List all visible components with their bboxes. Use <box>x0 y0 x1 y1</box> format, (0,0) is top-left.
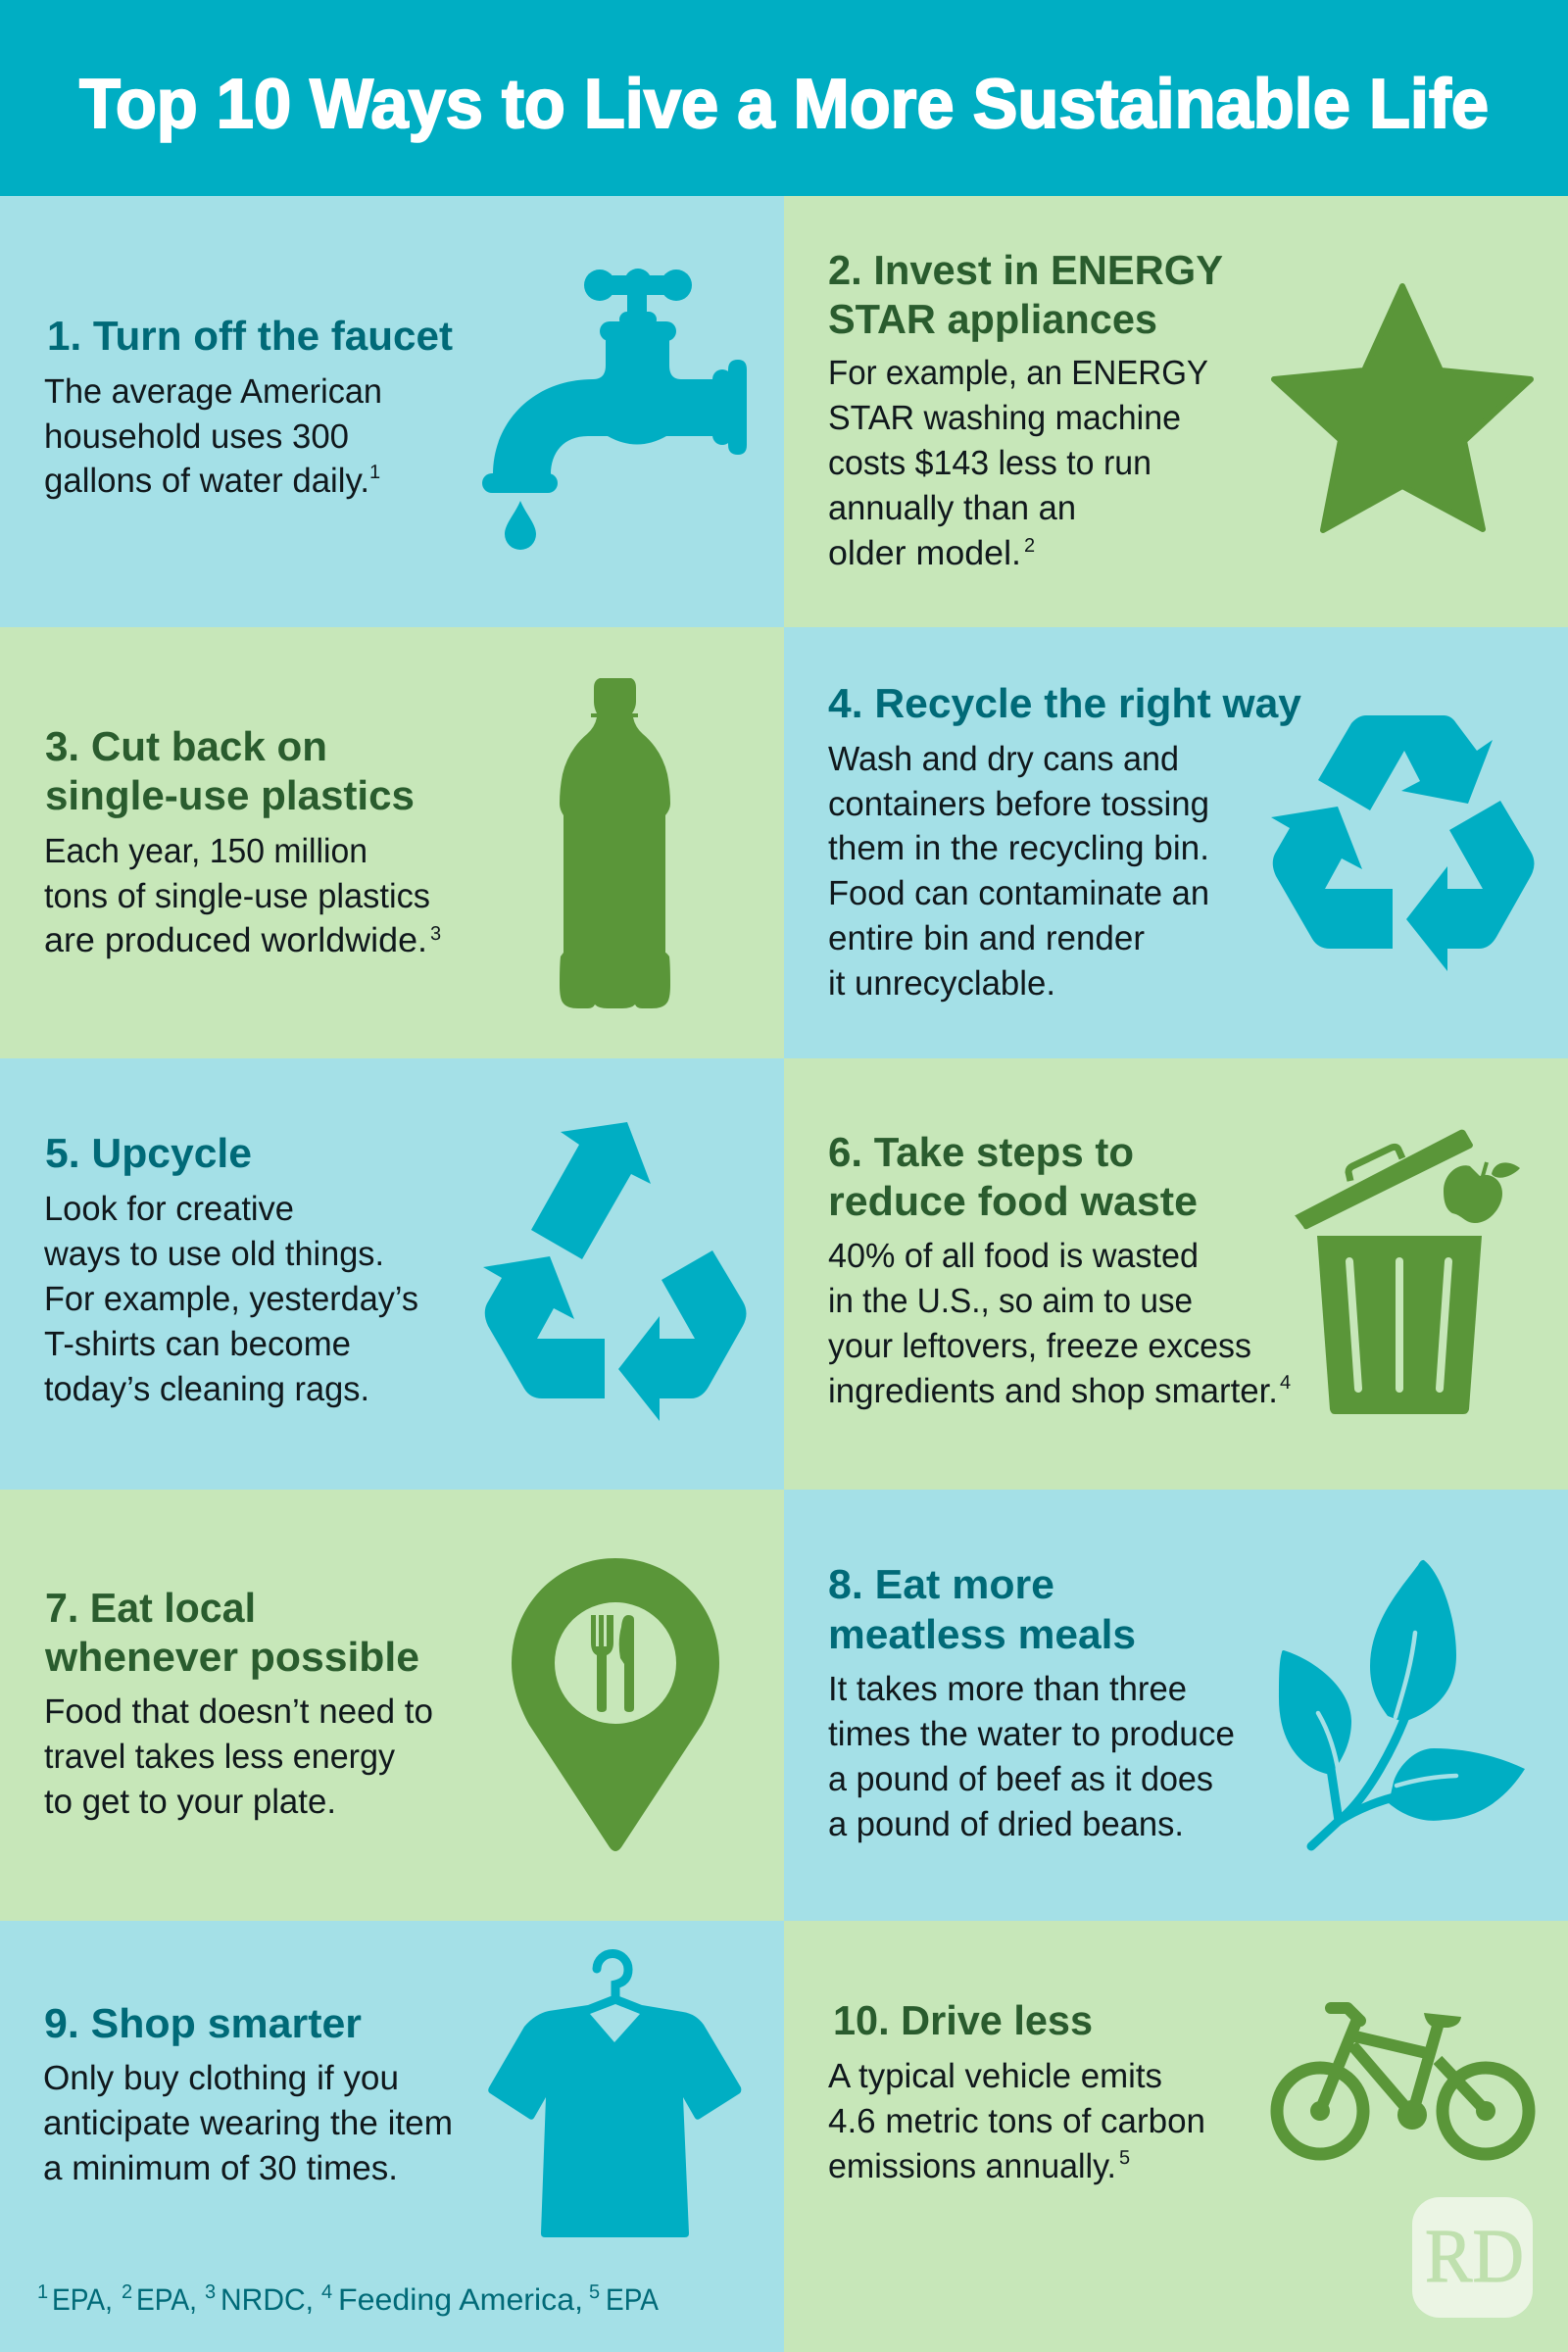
icon: trash can with apple <box>1295 1130 1520 1414</box>
text block: 3: tons of single-use plastics <box>44 877 430 915</box>
text block: 2: annually than an <box>828 489 1076 527</box>
panel: 2 energy star <box>784 196 1568 627</box>
text block: 5: Look for creative <box>44 1190 294 1228</box>
text block: 2: older model. <box>828 534 1021 572</box>
text block: 2: STAR washing machine <box>828 399 1181 437</box>
text block: 10: 4.6 metric tons of carbon <box>828 2102 1205 2140</box>
text block: 4: them in the recycling bin. <box>828 829 1209 867</box>
text block: 9: a minimum of 30 times. <box>43 2149 398 2187</box>
text block: 4 <box>828 740 1209 1003</box>
heading: 7: whenever possible <box>44 1634 419 1680</box>
heading: 3 <box>45 723 415 818</box>
panel: 1 turn off the faucet <box>0 196 784 627</box>
icon: recycle symbol <box>1271 715 1535 971</box>
heading: 2: STAR appliances <box>828 296 1157 342</box>
icon: faucet <box>482 269 747 550</box>
text block: 10: emissions annually. <box>828 2147 1116 2185</box>
heading: 10: 10. Drive less <box>833 1997 1093 2043</box>
icon: bottle <box>560 678 670 1008</box>
footnotes: EPA <box>606 2282 659 2317</box>
footnotes: EPA, <box>52 2282 113 2317</box>
text block: 6: 40% of all food is wasted <box>828 1237 1199 1275</box>
footnotes: EPA, <box>136 2282 197 2317</box>
text block: 4: Food can contaminate an <box>828 874 1209 912</box>
text block: 8: It takes more than three <box>828 1670 1187 1708</box>
panel: 4 recycle the right way <box>784 627 1568 1058</box>
text block: 9 <box>43 2059 453 2187</box>
heading: 1: 1. Turn off the faucet <box>47 313 453 359</box>
heading: 3: single-use plastics <box>45 772 415 818</box>
text block: 2: costs $143 less to run <box>828 444 1152 482</box>
text block: 3: Each year, 150 million <box>44 832 368 870</box>
text block: 6: in the U.S., so aim to use <box>828 1282 1193 1320</box>
heading: 3: 3. Cut back on <box>45 723 327 769</box>
text block: 1: 1 <box>369 462 380 483</box>
text block: 10: A typical vehicle emits <box>828 2057 1162 2095</box>
logo: RD <box>1412 2197 1533 2318</box>
text block: 4: entire bin and render <box>828 919 1145 957</box>
icon: t-shirt on hanger <box>488 1954 741 2237</box>
text block: 5 <box>43 1190 418 1408</box>
logo: RD: RD <box>1425 2213 1524 2298</box>
icon: bicycle <box>1277 2008 1529 2154</box>
text block: 6: your leftovers, freeze excess <box>828 1327 1251 1365</box>
footnotes: 3 <box>205 2281 216 2303</box>
text block: 6: 4 <box>1280 1372 1291 1394</box>
heading: 5: 5. Upcycle <box>45 1130 252 1176</box>
heading: 7: 7. Eat local <box>45 1585 256 1631</box>
panel: 9 shop smarter <box>0 1921 784 2352</box>
text block: 8: times the water to produce <box>828 1715 1235 1753</box>
text block: 1: The average American <box>44 372 382 411</box>
text block: 10: 5 <box>1119 2147 1130 2169</box>
text block: 2: 2 <box>1024 535 1035 557</box>
footnotes <box>37 2281 659 2317</box>
panel: 5 upcycle <box>0 1058 784 1490</box>
text block: 7: Food that doesn’t need to <box>44 1692 433 1731</box>
text block: 8 <box>828 1670 1235 1843</box>
text block: 3: are produced worldwide. <box>44 921 427 959</box>
icon: map pin with fork and knife <box>512 1558 719 1851</box>
text block: 9: anticipate wearing the item <box>43 2104 453 2142</box>
panel: 10 drive less <box>784 1921 1568 2352</box>
text block: 4: containers before tossing <box>828 785 1209 823</box>
header banner <box>0 0 1568 196</box>
text block: 9: Only buy clothing if you <box>43 2059 399 2097</box>
text block: 8: a pound of beef as it does <box>828 1760 1213 1798</box>
footnotes: NRDC, <box>220 2282 314 2317</box>
text block: 7: travel takes less energy <box>44 1738 395 1776</box>
heading: 8: 8. Eat more <box>828 1561 1054 1607</box>
heading: 6: reduce food waste <box>828 1178 1198 1224</box>
panel: 8 meatless meals <box>784 1490 1568 1921</box>
heading: 8: meatless meals <box>828 1611 1136 1657</box>
text block: 7: to get to your plate. <box>44 1783 336 1821</box>
text block: 6 <box>828 1237 1291 1410</box>
panel: 6 reduce food waste <box>784 1058 1568 1490</box>
footnotes: 1 <box>37 2281 48 2303</box>
footnotes: 5 <box>589 2281 600 2303</box>
icon: leaves <box>1279 1560 1525 1846</box>
heading: 8 <box>828 1561 1136 1657</box>
text block: 1: gallons of water daily. <box>44 462 369 500</box>
text block: 1: household uses 300 <box>44 417 349 456</box>
text block: 1 <box>44 372 382 500</box>
icon: water drop <box>505 501 536 550</box>
heading: 6 <box>828 1129 1198 1224</box>
heading: 6: 6. Take steps to <box>828 1129 1134 1175</box>
text block: 5: T-shirts can become <box>44 1325 351 1363</box>
text block: 4: it unrecyclable. <box>828 964 1055 1003</box>
text block: 6: ingredients and shop smarter. <box>828 1372 1278 1410</box>
text block: 3: 3 <box>430 923 441 945</box>
footnotes: 2 <box>122 2281 132 2303</box>
text block: 2: For example, an ENERGY <box>828 354 1208 392</box>
text block: 2 <box>828 354 1208 572</box>
heading: 2 <box>828 247 1223 342</box>
heading: 2: 2. Invest in ENERGY <box>828 247 1223 293</box>
heading: 7 <box>44 1585 419 1680</box>
heading: 4: 4. Recycle the right way <box>828 680 1302 726</box>
icon: star <box>1274 286 1531 530</box>
title: Top 10 Ways to Live a More Sustainable Life <box>79 66 1489 143</box>
text block: 5: For example, yesterday’s <box>44 1280 418 1318</box>
panel: 7 eat local <box>0 1490 784 1921</box>
footnotes: 4 <box>321 2281 332 2303</box>
text block: 5: ways to use old things. <box>43 1235 384 1273</box>
text block: 7 <box>44 1692 433 1821</box>
panel: 3 single-use plastics <box>0 627 784 1058</box>
heading: 9: 9. Shop smarter <box>44 2000 362 2046</box>
text block: 8: a pound of dried beans. <box>828 1805 1184 1843</box>
text block: 10 <box>828 2057 1205 2185</box>
text block: 4: Wash and dry cans and <box>828 740 1179 778</box>
text block: 5: today’s cleaning rags. <box>44 1370 369 1408</box>
footnotes: Feeding America, <box>338 2282 583 2317</box>
text block: 3 <box>44 832 441 959</box>
icon: upcycle arrows <box>483 1122 747 1421</box>
